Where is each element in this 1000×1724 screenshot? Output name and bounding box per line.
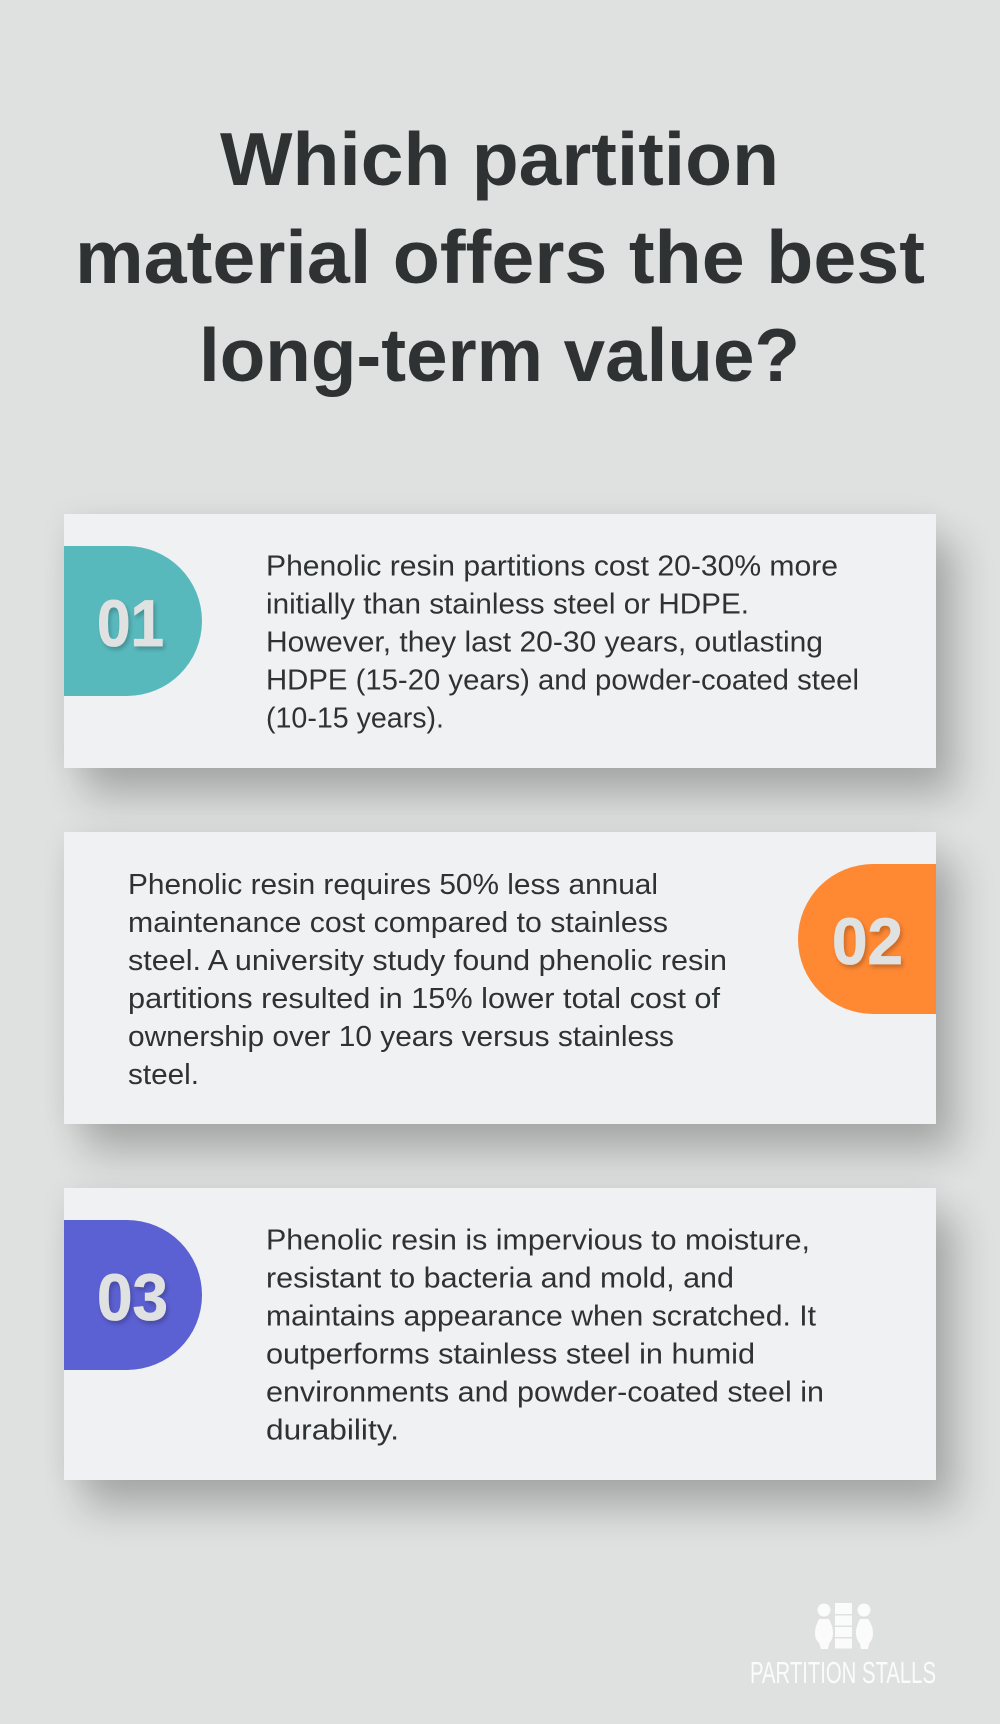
badge: 02	[798, 864, 936, 1014]
text block: card 1: Phenolic resin partitions cost 20-30% more	[266, 550, 838, 582]
text block: card 2: steel.	[128, 1059, 199, 1091]
panel: card 2	[64, 832, 956, 1152]
panel: card 1	[64, 514, 956, 796]
text block: card 1	[266, 550, 859, 734]
title: long-term value?	[199, 313, 800, 397]
badge: 01: 01	[97, 586, 164, 660]
logo: Partition Stalls	[750, 1603, 936, 1690]
text block: card 1: initially than stainless steel or HDPE.	[266, 588, 749, 620]
panel: card 3	[64, 1188, 956, 1508]
text block: card 2: maintenance cost compared to stainless	[128, 907, 668, 939]
badge: 01	[64, 546, 202, 696]
text block: card 2: ownership over 10 years versus stainless	[128, 1021, 674, 1053]
badge: 03: 03	[97, 1260, 168, 1334]
icon: stall and two figures	[815, 1603, 873, 1649]
title: material offers the best	[75, 215, 925, 299]
text block: card 1: (10-15 years).	[266, 702, 444, 734]
text block: card 3: maintains appearance when scratched. It	[266, 1300, 816, 1332]
text block: card 3: resistant to bacteria and mold, and	[266, 1262, 734, 1294]
text block: card 1: HDPE (15-20 years) and powder-coated steel	[266, 664, 859, 696]
text block: card 2: partitions resulted in 15% lower total cost of	[128, 983, 721, 1015]
badge: 02: 02	[832, 904, 903, 978]
title: Which partition	[220, 117, 779, 201]
text block: card 3: Phenolic resin is impervious to moisture,	[266, 1224, 810, 1256]
text block: card 1: However, they last 20-30 years, outlasting	[266, 626, 823, 658]
text block: card 3: environments and powder-coated steel in	[266, 1376, 824, 1408]
text block: card 3: outperforms stainless steel in humid	[266, 1338, 755, 1370]
text block: card 3	[266, 1224, 824, 1446]
badge: 03	[64, 1220, 202, 1370]
text block: card 2: Phenolic resin requires 50% less annual	[128, 869, 658, 901]
text block: card 2	[128, 869, 727, 1091]
text block: card 2: steel. A university study found phenolic resin	[128, 945, 727, 977]
text block: card 3: durability.	[266, 1414, 399, 1446]
title	[75, 117, 925, 397]
